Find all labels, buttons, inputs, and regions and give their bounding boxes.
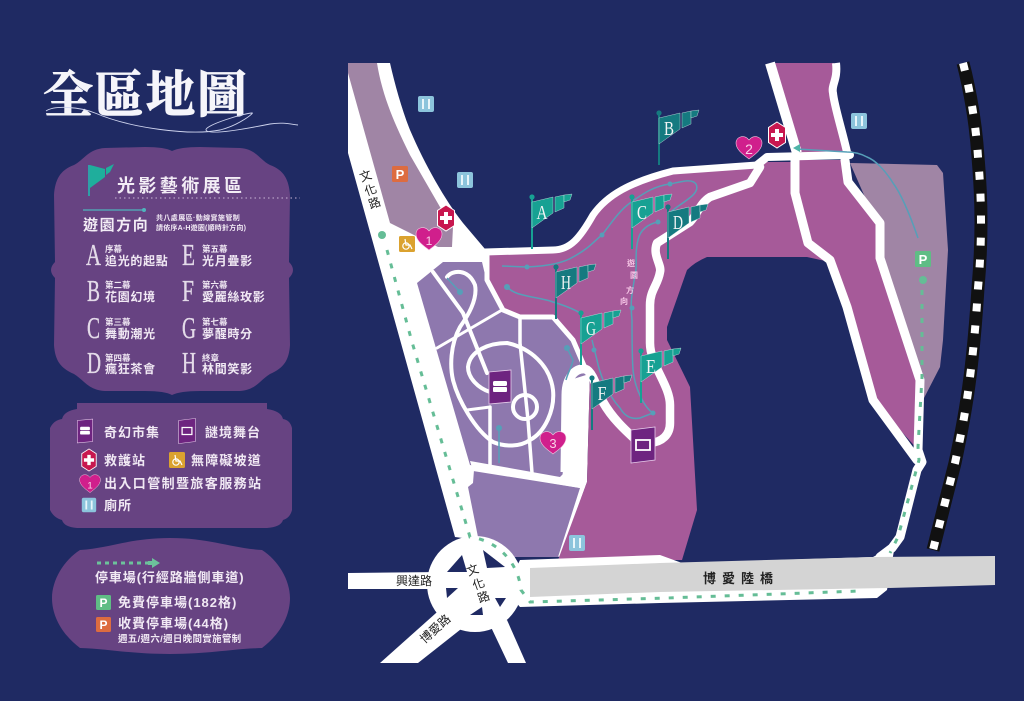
first aid label: 救護站 xyxy=(104,453,146,468)
acts list: 終章 xyxy=(202,353,220,363)
area: south lawn xyxy=(468,470,580,557)
direction note: 共八處展區·動線實施管制 xyxy=(156,213,240,222)
flag: D: D xyxy=(673,212,683,234)
road label: 文化路 north: 路 xyxy=(366,194,383,212)
flag: H xyxy=(553,264,596,319)
acts list: E xyxy=(182,237,195,272)
icon: restroom 2 xyxy=(457,172,473,188)
acts list: 第六幕 xyxy=(202,280,228,290)
icon: stage card xyxy=(179,418,195,444)
icon: service heart xyxy=(80,475,100,493)
railway xyxy=(933,63,981,550)
stage label: 謎境舞台 xyxy=(205,425,261,440)
icon: wheelchair ramp xyxy=(399,236,415,252)
acts list: A xyxy=(86,237,101,272)
direction heading: 遊園方向 xyxy=(83,216,149,234)
icon: heart 1: 1 xyxy=(426,234,433,248)
icon: heart 3 xyxy=(540,432,566,454)
acts list: G xyxy=(182,310,196,345)
flag: F: F xyxy=(598,383,606,405)
panel: parking legend xyxy=(52,538,290,654)
map: venue areas xyxy=(348,63,948,560)
area: garden lawn xyxy=(417,262,586,482)
acts list: B xyxy=(87,273,100,308)
area: main park xyxy=(487,162,830,560)
icon: free parking: P xyxy=(919,252,928,267)
acts list: 第五幕 xyxy=(202,244,228,254)
flag: D xyxy=(665,204,708,259)
route direction label: 方 xyxy=(626,285,634,295)
flag: A xyxy=(529,194,572,249)
flag: E xyxy=(638,348,681,403)
route direction label xyxy=(620,258,638,306)
flag: F xyxy=(589,375,632,430)
road label: 文化路 south: 路 xyxy=(475,588,492,606)
icon: heart 1 xyxy=(416,228,442,250)
area: north strip xyxy=(772,63,847,155)
icon: heart 2: 2 xyxy=(745,141,753,157)
flag: G xyxy=(578,310,621,365)
parking note: 週五/週六/週日晚間實施管制 xyxy=(118,633,241,645)
icon: free parking xyxy=(915,251,931,267)
road label: 博愛路: 博愛路 xyxy=(417,611,453,646)
road label: 興達路: 興達路 xyxy=(396,573,432,588)
free parking label: 免費停車場(182格) xyxy=(118,595,237,610)
flag: H: H xyxy=(561,272,571,294)
restroom label: 廁所 xyxy=(104,498,132,513)
title: 全區地圖 xyxy=(43,67,247,123)
visiting route lines xyxy=(447,149,918,463)
area: east parking xyxy=(850,163,948,400)
title xyxy=(43,67,298,132)
icon: legend flag xyxy=(89,164,114,196)
bridge xyxy=(530,556,995,597)
map: road junction xyxy=(348,461,895,663)
panel: exhibition legend xyxy=(51,147,300,395)
panel: facilities legend xyxy=(50,403,292,528)
road label: 文化路 south xyxy=(464,561,492,606)
icon: free parking xyxy=(96,595,111,610)
icon: paid parking xyxy=(392,166,408,182)
route start dots xyxy=(378,231,927,284)
flag: C: C xyxy=(637,202,647,224)
acts list: H xyxy=(182,345,196,380)
acts list: 光月疊影 xyxy=(202,253,253,268)
icon: free parking: P xyxy=(99,596,108,610)
icon: heart 2 xyxy=(736,137,762,159)
acts list: 愛麗絲玫影 xyxy=(202,289,266,304)
road label: 文化路 north: 文 xyxy=(357,167,374,185)
icon: paid parking: P xyxy=(396,167,405,182)
flag: C xyxy=(629,194,672,249)
icon: first aid north xyxy=(768,122,786,148)
parking heading: 停車場(行經路牆側車道) xyxy=(95,570,244,585)
heading: 光影藝術展區 xyxy=(117,175,245,196)
icon: first aid xyxy=(82,449,96,471)
road label: 文化路 south: 文 xyxy=(464,561,481,579)
icon: restroom 1 xyxy=(418,96,434,112)
market label: 奇幻市集 xyxy=(104,425,160,440)
road label: 文化路 south: 化 xyxy=(471,576,487,593)
ramp label: 無障礙坡道 xyxy=(191,453,262,468)
direction note xyxy=(156,213,246,232)
acts list: 追光的起點 xyxy=(105,253,169,268)
icon: heart 3: 3 xyxy=(549,436,557,451)
route direction label: 向 xyxy=(620,296,628,306)
road label: 文化路 north: 化 xyxy=(363,182,379,199)
flag: E: E xyxy=(646,356,656,378)
flag: G: G xyxy=(586,318,596,340)
direction note: 請依序A-H遊園(順時針方向) xyxy=(156,223,246,232)
acts list: C xyxy=(87,310,100,345)
acts list: 第二幕 xyxy=(105,280,131,290)
acts list: 夢醒時分 xyxy=(202,326,253,341)
acts list: 第七幕 xyxy=(202,317,228,327)
map: white roads xyxy=(433,63,922,557)
route direction label: 園 xyxy=(630,271,638,280)
paid parking label: 收費停車場(44格) xyxy=(118,616,229,631)
area: central strip xyxy=(795,160,920,452)
acts list xyxy=(86,237,266,380)
icon: wheelchair xyxy=(169,452,185,468)
bridge label: 博愛陸橋 xyxy=(703,571,779,586)
icon: restroom 3 xyxy=(851,113,867,129)
icon: market card xyxy=(77,419,93,443)
acts list: 舞動潮光 xyxy=(105,326,156,341)
acts list: D xyxy=(87,345,101,380)
acts list: 第三幕 xyxy=(105,317,131,327)
service label: 出入口管制暨旅客服務站 xyxy=(104,476,262,491)
icon: market card xyxy=(489,370,511,404)
road label: 文化路 north xyxy=(357,167,383,212)
icon: service heart: 1 xyxy=(87,481,93,492)
icon: restroom 4 xyxy=(569,535,585,551)
area: north-west parking xyxy=(348,63,453,247)
acts list: 林間笑影 xyxy=(202,361,253,376)
icon: paid parking: P xyxy=(99,618,108,632)
acts list: 第四幕 xyxy=(105,353,131,363)
route markers xyxy=(457,144,800,431)
icon: first aid west xyxy=(438,205,454,231)
route direction label: 遊 xyxy=(627,258,635,268)
area: left white road base xyxy=(348,63,590,557)
flag: B: B xyxy=(664,118,674,140)
acts list: F xyxy=(182,273,194,308)
parking route dashes xyxy=(387,250,922,602)
icon: restroom xyxy=(82,498,96,512)
icon: paid parking xyxy=(96,617,111,632)
acts list: 花園幻境 xyxy=(105,289,156,304)
flag: A: A xyxy=(536,202,548,224)
acts list: 序幕 xyxy=(105,244,123,254)
icon: stage card xyxy=(631,427,655,463)
acts list: 瘋狂茶會 xyxy=(105,361,156,376)
flag: B xyxy=(656,110,699,165)
parking route arrow xyxy=(97,558,160,568)
